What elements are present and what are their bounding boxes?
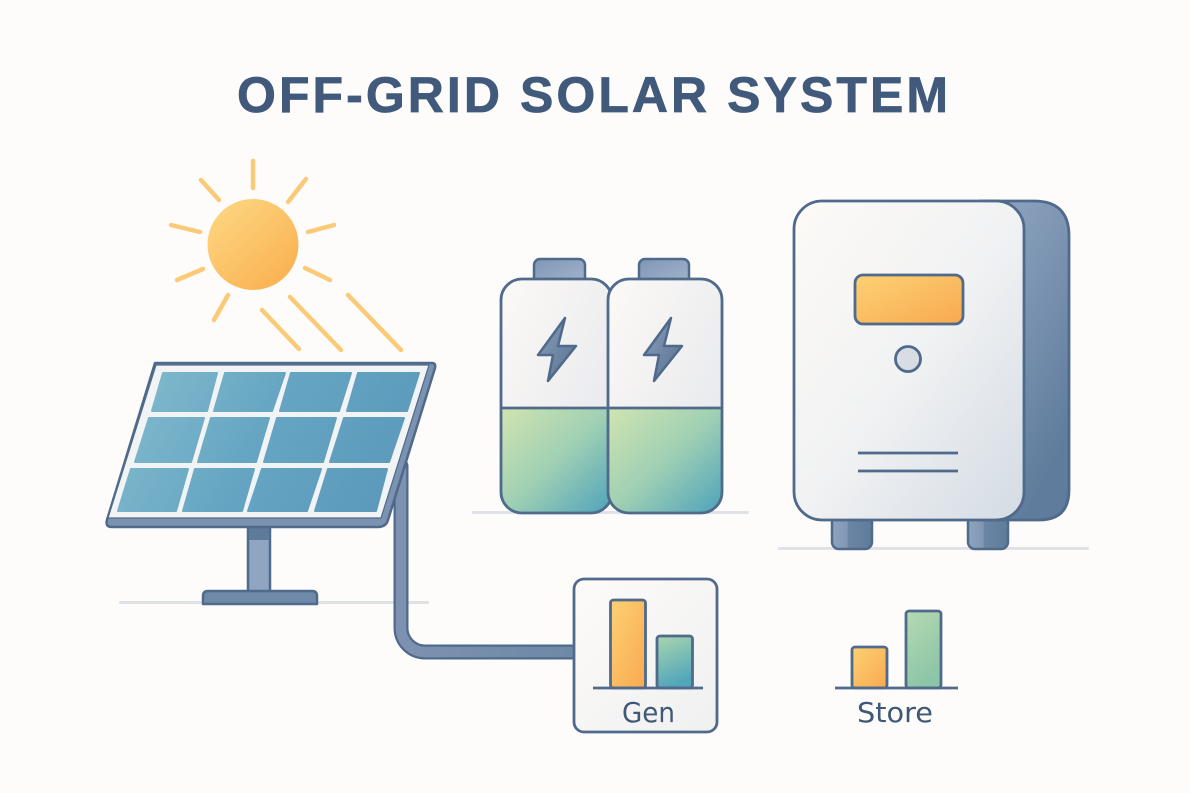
icon: sun with rays: [171, 161, 401, 350]
battery body: [608, 279, 722, 513]
bar: generation low: [657, 636, 692, 688]
inverter vents: [858, 453, 958, 471]
title: OFF-GRID SOLAR SYSTEM: [237, 67, 948, 123]
inverter front: [794, 201, 1024, 520]
generation chart card: [574, 579, 717, 732]
inverter button: [896, 346, 920, 372]
label: Gen: Gen: [622, 696, 675, 729]
battery left: [501, 259, 612, 513]
bar: storage low: [852, 647, 887, 688]
battery right: [608, 259, 722, 513]
inverter display: [855, 275, 963, 324]
ground line: batteries: [472, 511, 749, 514]
storage chart: [835, 611, 958, 729]
inverter side: [980, 201, 1069, 520]
bar: generation high: [610, 600, 646, 688]
battery cap: [639, 259, 689, 285]
icon: lightning bolt: [538, 318, 576, 381]
battery cap: [534, 259, 585, 285]
battery body: [501, 279, 612, 513]
ground line: inverter: [778, 547, 1089, 550]
cable from panel to generation chart: [401, 466, 576, 652]
label: Store: Store: [857, 696, 933, 729]
panel stand: [203, 526, 317, 604]
panel cells: [118, 373, 419, 511]
sun disc: [208, 199, 298, 290]
ground line: solar panel: [119, 601, 429, 604]
icon: lightning bolt: [644, 318, 682, 381]
sun rays: [171, 161, 401, 350]
bar: storage high: [906, 611, 941, 688]
solar panel: [107, 363, 435, 604]
battery charge level: [502, 408, 611, 512]
panel frame: [107, 363, 435, 527]
inverter: [794, 201, 1069, 549]
battery charge level: [609, 408, 721, 512]
inverter feet: [832, 510, 872, 549]
